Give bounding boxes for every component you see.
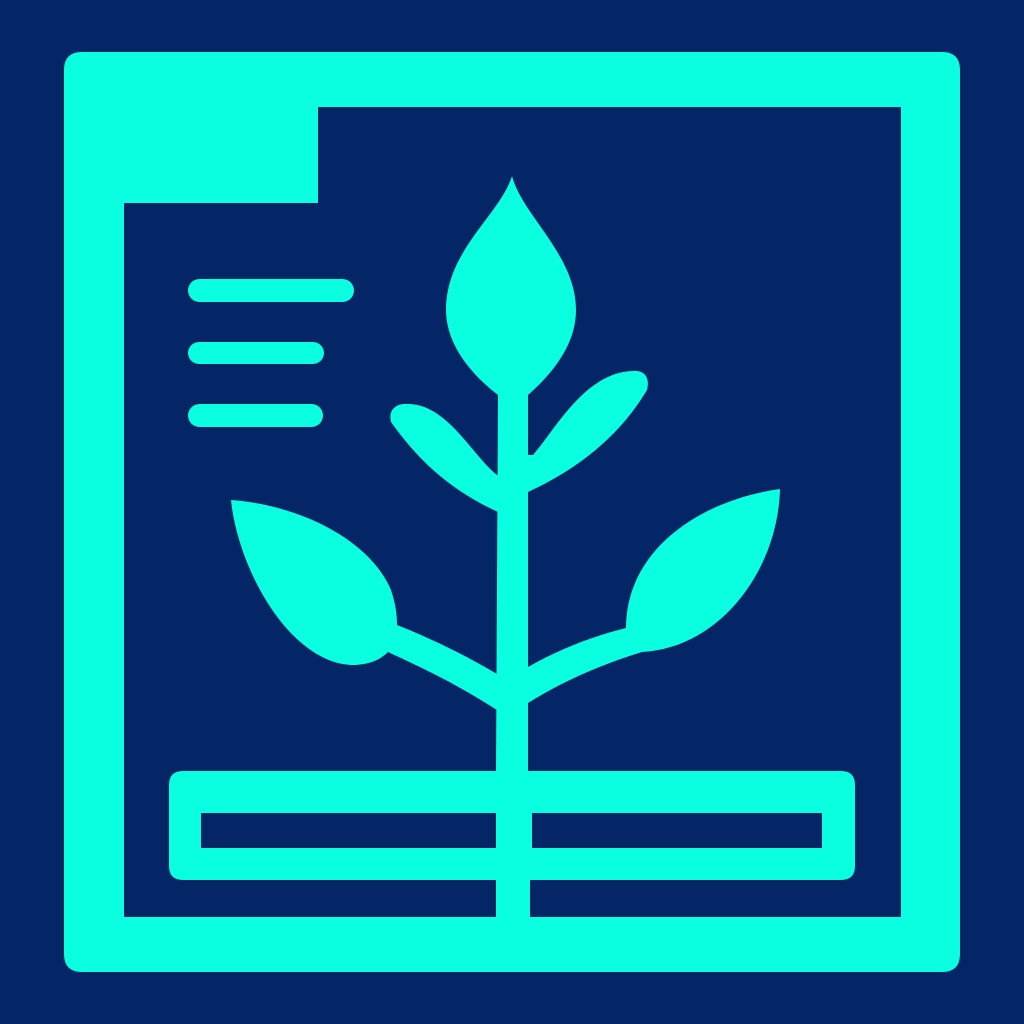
upper right leaf — [528, 371, 648, 492]
document frame with folded corner — [64, 52, 960, 972]
stem root — [496, 771, 530, 917]
soil bar — [169, 771, 855, 880]
upper left leaf — [390, 404, 498, 512]
lower left leaf and branch — [231, 500, 497, 710]
text lines — [188, 279, 354, 427]
top leaf — [446, 176, 576, 395]
lower right leaf and branch — [528, 489, 780, 703]
plant stem — [496, 390, 528, 771]
